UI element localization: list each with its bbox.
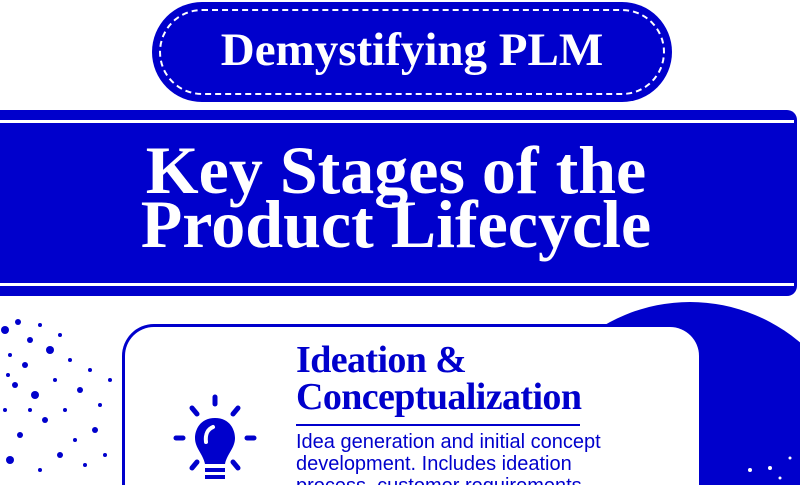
panel: ideation card	[122, 324, 702, 485]
title banner: Product Lifecycle	[141, 186, 651, 262]
pill: subtitle	[152, 2, 672, 102]
decorative big circle	[606, 302, 800, 485]
heading: stage title: Conceptualization	[296, 376, 581, 418]
icon: light bulb	[174, 394, 256, 479]
heading: stage title: Ideation &	[296, 339, 466, 381]
underline	[296, 424, 580, 426]
pill: subtitle: Demystifying PLM	[221, 24, 603, 76]
decorative dots on circle	[748, 456, 792, 480]
decorative speckle texture	[1, 319, 112, 472]
title banner	[0, 110, 797, 296]
title banner: Key Stages of the	[146, 132, 646, 208]
heading: stage title	[296, 339, 582, 418]
